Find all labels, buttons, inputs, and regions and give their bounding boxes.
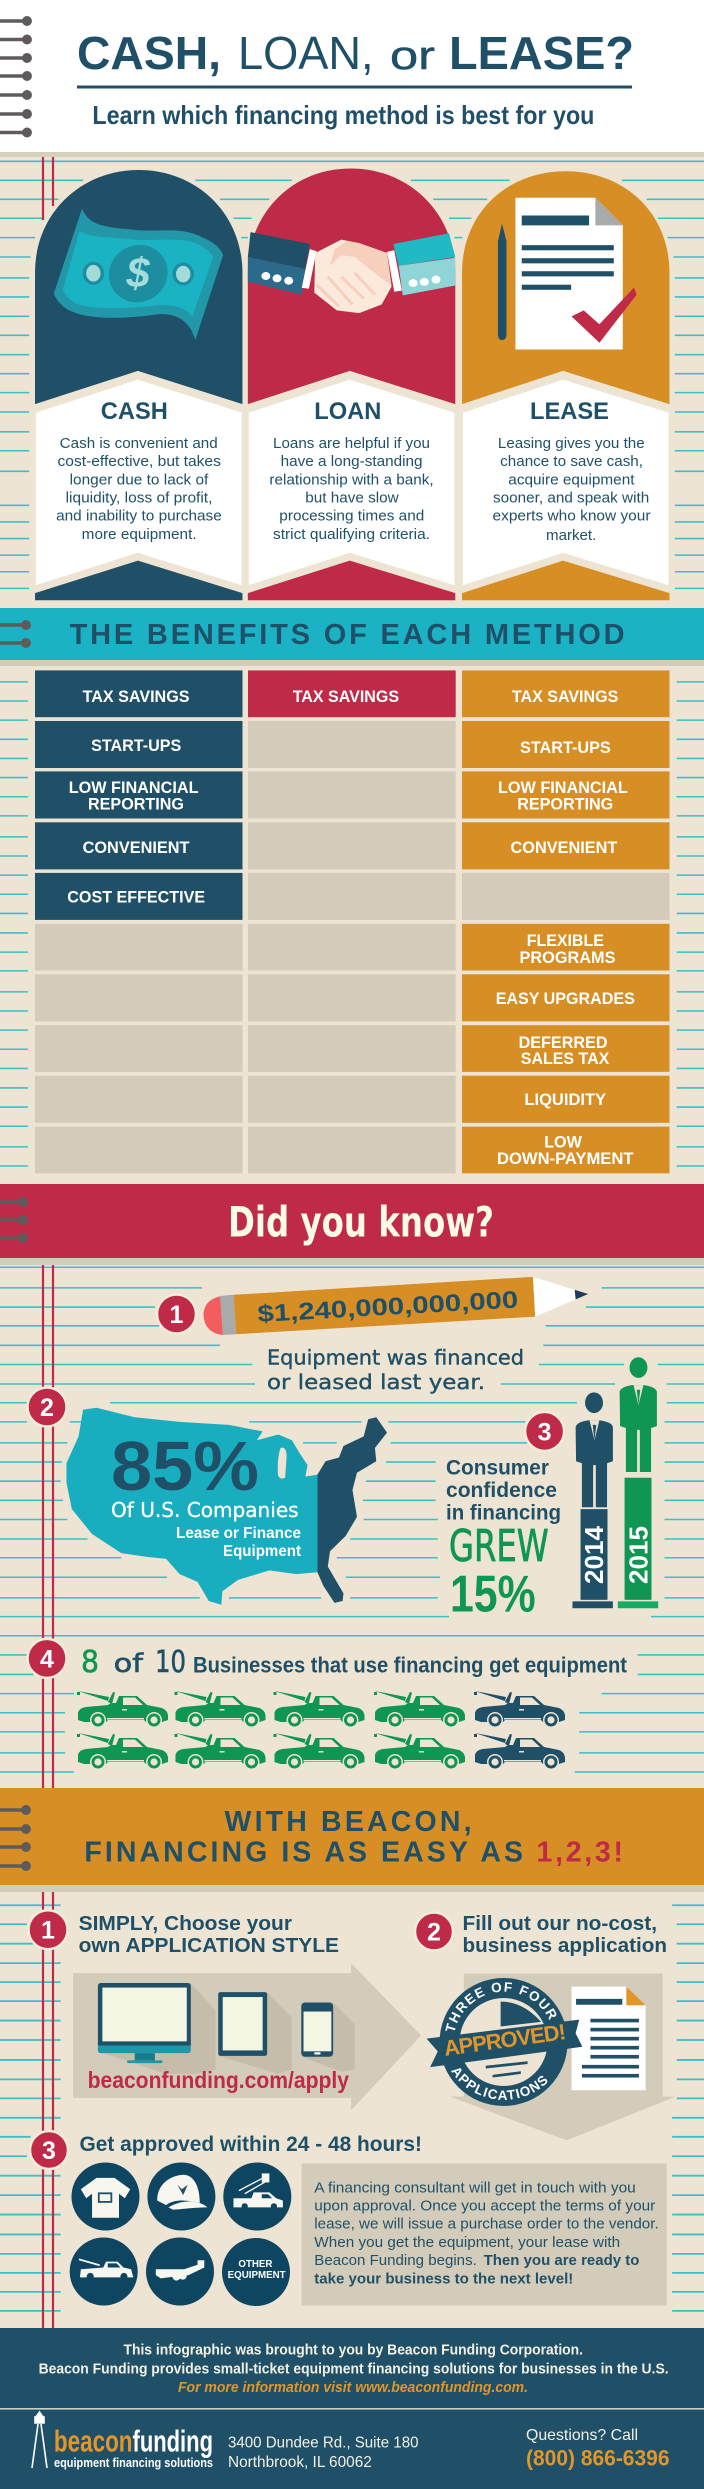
- column: loan benefits: [248, 670, 456, 1173]
- stat text: 10: [155, 1645, 186, 1680]
- title: [77, 27, 634, 79]
- icon: document, pen and check: [498, 198, 637, 350]
- icons: ten tow trucks: [77, 1691, 565, 1770]
- column: cash benefits: LOW FINANCIAL: [69, 779, 198, 797]
- heading: Fill out our no-cost,: [462, 1912, 657, 1935]
- text block: Beacon Funding begins.: [314, 2253, 477, 2269]
- badge 3: [525, 1412, 564, 1451]
- address: [228, 2434, 419, 2471]
- icon: lighthouse: [32, 2412, 47, 2468]
- text block: lease, we will issue a purchase order to the vendor.: [314, 2217, 659, 2233]
- text: loan description: have a long-standing: [281, 453, 422, 470]
- icon: cap: [157, 2175, 207, 2210]
- text: loan description: relationship with a bank,: [269, 471, 434, 488]
- badge 3: 3: [538, 1418, 552, 1446]
- column: lease benefits: LIQUIDITY: [524, 1091, 606, 1109]
- column: cash benefits: REPORTING: [88, 795, 184, 813]
- badge 2: [28, 1388, 66, 1426]
- title: or: [390, 34, 435, 78]
- column: lease benefits: FLEXIBLE: [527, 932, 604, 950]
- heading band: benefits: THE BENEFITS OF EACH METHOD: [70, 619, 625, 651]
- map caption: [111, 1498, 301, 1560]
- heading: business application: [462, 1934, 667, 1957]
- footer credits: For more information visit www.beaconfunding.com.: [178, 2380, 528, 2396]
- map stat: 85%: [111, 1427, 259, 1505]
- column: cash benefits: COST EFFECTIVE: [67, 888, 205, 906]
- badge 1: [157, 1294, 196, 1334]
- title: CASH,: [77, 27, 221, 79]
- map of the U.S.: [66, 1408, 387, 1605]
- icon: other equipment: OTHER: [238, 2258, 273, 2270]
- stat 1: pencil: [157, 1277, 588, 1394]
- heading band: benefits: [0, 608, 704, 666]
- text: lease description: Leasing gives you the: [498, 435, 645, 452]
- arch: lease: [462, 171, 669, 600]
- text block: A financing consultant will get in touch with you: [314, 2180, 636, 2196]
- phone: [301, 2002, 333, 2057]
- column: lease benefits: CONVENIENT: [510, 839, 617, 857]
- text: cash description: more equipment.: [82, 526, 197, 543]
- badge 2: 2: [427, 1918, 441, 1946]
- phone contact: Questions? Call: [526, 2427, 638, 2444]
- caption: Equipment was financed: [267, 1346, 524, 1370]
- column: cash benefits: TAX SAVINGS: [83, 688, 190, 706]
- step 1: application style: [28, 1910, 421, 2110]
- text: lease description: market.: [546, 527, 596, 544]
- text block: Then you are ready to: [484, 2253, 640, 2269]
- icon: tow truck: [79, 2259, 133, 2280]
- caption: or leased last year.: [267, 1370, 485, 1394]
- footer: [0, 2328, 704, 2489]
- badge 2: 2: [40, 1394, 54, 1422]
- text: lease description: sooner, and speak with: [493, 490, 649, 507]
- title: LOAN,: [238, 27, 374, 79]
- figure: 2015: [618, 1357, 658, 1608]
- arrow with devices: [73, 1963, 421, 2110]
- logo: equipment financing solutions: [54, 2455, 213, 2470]
- column: lease benefits: SALES TAX: [521, 1050, 609, 1068]
- column: cash benefits: START-UPS: [91, 737, 181, 755]
- stat text: [81, 1645, 628, 1680]
- text: 15%: [450, 1566, 536, 1624]
- caption: [267, 1346, 524, 1394]
- stat 4: tow trucks: [28, 1639, 628, 1770]
- heading: lease: LEASE: [530, 399, 609, 425]
- address: 3400 Dundee Rd., Suite 180: [228, 2434, 419, 2452]
- footer credits: This infographic was brought to you by Beacon Funding Corporation.: [124, 2343, 583, 2359]
- text block: [302, 2164, 667, 2306]
- text block: upon approval. Once you accept the terms of your: [314, 2198, 655, 2214]
- arch: loan: [248, 168, 455, 600]
- heading band: with beacon: 1,2,3!: [536, 1836, 623, 1868]
- stat text: 8: [81, 1645, 99, 1680]
- icons: equipment types: [70, 2162, 291, 2306]
- logo: [32, 2412, 213, 2470]
- heading band: with beacon: FINANCING IS AS EASY AS: [84, 1836, 523, 1868]
- heading band: did you know: Did you know?: [228, 1198, 494, 1247]
- badge 4: 4: [40, 1645, 54, 1673]
- text: [446, 1457, 561, 1624]
- map caption: Lease or Finance: [176, 1525, 301, 1542]
- column: lease benefits: [462, 670, 670, 1173]
- column: lease benefits: DOWN-PAYMENT: [497, 1150, 634, 1168]
- logo: beacon: [54, 2424, 132, 2458]
- url: beaconfunding.com/apply: [88, 2067, 349, 2093]
- icon: pencil: [203, 1277, 588, 1335]
- figure: 2014: [572, 1392, 613, 1608]
- column: lease benefits: REPORTING: [517, 795, 613, 813]
- stat text: Businesses that use financing get equipment: [193, 1652, 628, 1678]
- text: confidence: [446, 1479, 557, 1502]
- icon: other equipment: EQUIPMENT: [228, 2269, 286, 2281]
- footer credits: Beacon Funding provides small-ticket equipment financing solutions for businesses in the U.S.: [39, 2361, 669, 2377]
- text: Consumer: [446, 1457, 549, 1480]
- column: lease benefits: LOW: [544, 1134, 582, 1152]
- map caption: Equipment: [223, 1543, 301, 1560]
- text: cash description: [56, 435, 222, 543]
- icon: other equipment: [228, 2258, 286, 2281]
- column: loan benefits: TAX SAVINGS: [293, 688, 399, 706]
- badge 1: 1: [41, 1917, 55, 1945]
- column: lease benefits: PROGRAMS: [520, 949, 616, 967]
- text: loan description: but have slow: [305, 490, 399, 507]
- figure: 2015: 2015: [624, 1526, 654, 1584]
- subtitle: Learn which financing method is best for you: [92, 100, 594, 130]
- heading: [79, 1912, 339, 1957]
- column: cash benefits: [35, 670, 242, 1173]
- text: lease description: [492, 435, 651, 544]
- monitor: [98, 1983, 191, 2063]
- text: GREW: [449, 1521, 549, 1572]
- approved badge: [426, 1978, 582, 2106]
- text: cash description: cost-effective, but takes: [58, 453, 221, 470]
- heading band: with beacon: WITH BEACON,: [224, 1806, 472, 1838]
- title: LEASE?: [449, 27, 634, 79]
- column: lease benefits: LOW FINANCIAL: [498, 779, 628, 797]
- text: cash description: liquidity, loss of profit,: [66, 490, 212, 507]
- heading: Get approved within 24 - 48 hours!: [80, 2132, 422, 2156]
- approved badge: APPLICATIONS: [451, 2068, 548, 2100]
- step 2: business application: [414, 1912, 676, 2140]
- header panel: [0, 0, 704, 157]
- logo: funding: [132, 2424, 213, 2458]
- text: lease description: chance to save cash,: [500, 453, 643, 470]
- icon: dollar bill: [54, 208, 223, 340]
- address: Northbrook, IL 60062: [228, 2454, 372, 2471]
- badge 1: [28, 1910, 68, 1949]
- panel: loan: [248, 168, 455, 600]
- column: cash benefits: CONVENIENT: [83, 839, 190, 857]
- column: lease benefits: TAX SAVINGS: [512, 688, 618, 706]
- heading: loan: LOAN: [314, 399, 381, 425]
- arch: cash: [35, 170, 242, 600]
- tablet: [218, 1992, 267, 2056]
- badge 2: [415, 1912, 453, 1950]
- stat text: of: [114, 1649, 144, 1679]
- badge 1: 1: [170, 1301, 184, 1329]
- column: lease benefits: DEFERRED: [519, 1034, 608, 1052]
- heading: [462, 1912, 667, 1957]
- amount: $1,240,000,000,000: [257, 1286, 519, 1328]
- icon: handshake: [248, 232, 455, 313]
- icon: trailer: [156, 2260, 204, 2281]
- column: lease benefits: EASY UPGRADES: [496, 990, 635, 1008]
- text: cash description: longer due to lack of: [70, 471, 209, 488]
- text: cash description: Cash is convenient and: [60, 435, 218, 452]
- arrow with document: [450, 1974, 676, 2140]
- icon: t-shirt: [81, 2178, 130, 2218]
- approved badge: APPROVED!: [442, 2019, 567, 2061]
- icon: dollar bill: $: [125, 249, 150, 296]
- heading: SIMPLY, Choose your: [79, 1912, 292, 1935]
- text: cash description: and inability to purchase: [56, 508, 222, 525]
- phone contact: (800) 866-6396: [526, 2446, 670, 2470]
- stat 2: US map: [28, 1388, 387, 1605]
- text: loan description: processing times and: [279, 508, 424, 525]
- map caption: Of U.S. Companies: [111, 1498, 299, 1522]
- heading: own APPLICATION STYLE: [79, 1934, 339, 1957]
- figure: 2014: 2014: [579, 1525, 609, 1584]
- text: lease description: experts who know your: [492, 508, 651, 525]
- badge 4: [28, 1639, 66, 1678]
- phone contact: [526, 2427, 670, 2470]
- text: in financing: [446, 1502, 561, 1524]
- text: loan description: Loans are helpful if you: [273, 435, 430, 452]
- heading band: did you know: [0, 1184, 704, 1265]
- badge 3: [30, 2131, 68, 2169]
- text: loan description: [269, 435, 434, 543]
- badge 3: 3: [42, 2137, 56, 2165]
- panel: cash: [35, 170, 242, 600]
- text block: When you get the equipment, your lease with: [314, 2235, 620, 2251]
- approved badge: THREE OF FOUR: [445, 1982, 556, 2031]
- step 3: get approved: [30, 2131, 667, 2306]
- heading: cash: CASH: [101, 399, 168, 425]
- footer credits: [39, 2343, 669, 2396]
- icon: bucket truck: [233, 2173, 283, 2210]
- text: loan description: strict qualifying criteria.: [273, 526, 430, 543]
- stat 3: consumer confidence: [446, 1357, 658, 1624]
- notebook spiral: [0, 18, 30, 136]
- text block: take your business to the next level!: [314, 2271, 573, 2287]
- chart: benefits comparison table: [35, 670, 670, 1173]
- column: lease benefits: START-UPS: [520, 739, 611, 757]
- heading band: with beacon: [0, 1788, 704, 1892]
- panel: lease: [462, 171, 669, 600]
- text: lease description: acquire equipment: [508, 471, 635, 488]
